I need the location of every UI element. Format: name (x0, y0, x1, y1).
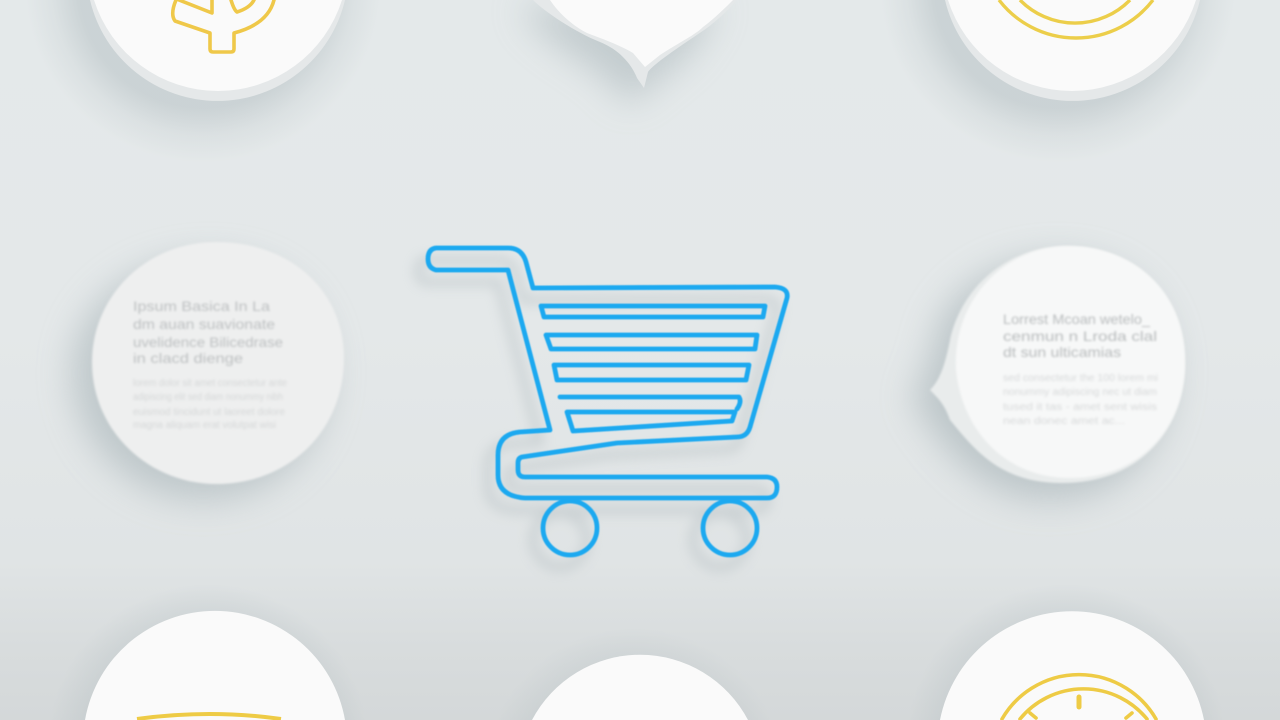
panel: right text bubble (912, 246, 1185, 500)
cart frame and handle (428, 248, 787, 498)
left wheel (543, 501, 597, 555)
body text (1003, 373, 1158, 427)
heading text (1003, 311, 1157, 360)
heading text: Lorrest Mcoan wetelo_ (1003, 311, 1150, 327)
body text: sed consectetur the 100 lorem mi (1003, 373, 1158, 384)
heading text: dm auan suavionate (133, 316, 275, 332)
icon: gold clock (1002, 675, 1156, 719)
heading text: cenmun n Lroda clal (1003, 328, 1157, 344)
body text: lorem dolor sit amet consectetur ante (133, 378, 287, 389)
basket slat 3 (554, 365, 749, 380)
panel: top-right clock bubble (875, 0, 1245, 165)
basket slat 5 (567, 412, 735, 431)
heading text: in clacd dienge (133, 350, 243, 366)
body text: nean donec amet ac... (1003, 416, 1125, 427)
body text: adipiscing elit sed diam nonummy nibh (133, 392, 283, 403)
panel: bottom-centre bubble (484, 628, 784, 720)
heading text: uvelidence Bilicedrase (133, 334, 283, 350)
basket slat 1 (541, 306, 765, 317)
heading text: dt sun ulticamias (1003, 344, 1121, 360)
basket slat 4 (560, 397, 740, 409)
panel: bottom-right clock bubble (905, 580, 1230, 720)
icon: dollar sign (173, 0, 274, 52)
panel: bottom-left bubble (45, 580, 375, 720)
icon: shopping cart shadow (418, 260, 777, 567)
body text: nonummy adipiscing nec ut diam (1003, 387, 1157, 398)
icon: shopping cart (428, 248, 787, 555)
body text: euismod tincidunt ut laoreet dolore (133, 407, 285, 418)
icon: gold ring arcs (999, 0, 1153, 38)
body text: tused it tas - amet sent wisis (1003, 402, 1157, 413)
body text (133, 378, 287, 431)
heading text (133, 298, 283, 366)
panel: top-centre teardrop bubble (520, 0, 737, 104)
right wheel (703, 501, 757, 555)
heading text: Ipsum Basica In La (133, 298, 270, 314)
body text: magna aliquam erat volutpat wisi (133, 420, 276, 431)
icon: gold arc (137, 714, 281, 719)
basket slat 2 (546, 335, 757, 349)
panel: top-left dollar bubble (20, 0, 390, 165)
panel: left text bubble (72, 242, 344, 500)
